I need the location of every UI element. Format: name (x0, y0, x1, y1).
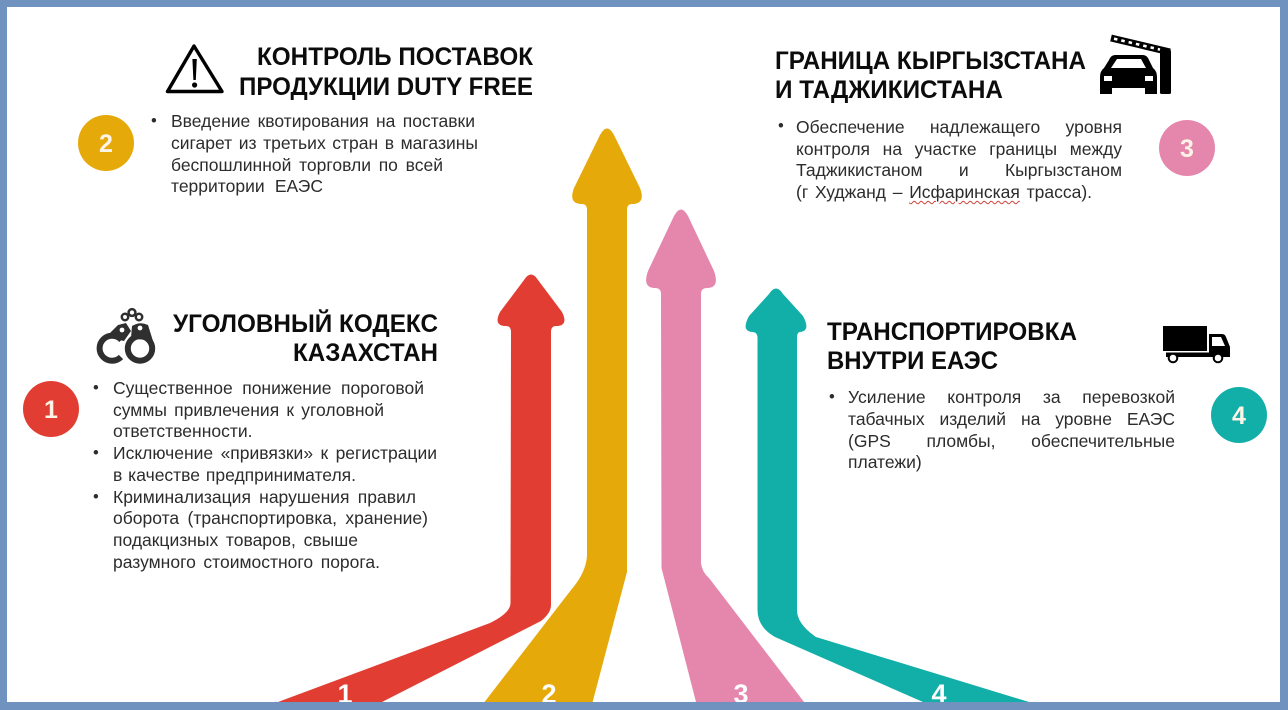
text block 1: • (93, 488, 99, 506)
icon: car at barrier (1100, 38, 1171, 94)
text block 1: Существенное понижение пороговой (113, 378, 424, 398)
text block 1: ответственности. (113, 421, 252, 441)
number badge 2: 2 (99, 130, 113, 158)
text block 1: суммы привлечения к уголовной (113, 400, 384, 420)
heading 3 (775, 47, 1086, 104)
icon: handcuffs (100, 309, 153, 361)
heading 4: ВНУТРИ ЕАЭС (827, 347, 998, 375)
text block 2: • (151, 112, 157, 130)
number badge 2 (78, 115, 134, 171)
heading 1 (173, 308, 438, 367)
text block 1: оборота (транспортировка, хранение) (113, 508, 428, 528)
arrow 2: yellow (484, 128, 642, 709)
arrow 4: teal: 4 (931, 679, 947, 709)
heading 2: ПРОДУКЦИИ DUTY FREE (239, 73, 533, 101)
number badge 1: 1 (44, 396, 58, 424)
number badge 4: 4 (1232, 402, 1246, 430)
panel 2: duty free (78, 43, 534, 196)
number badge 3 (1159, 120, 1215, 176)
heading 3: ГРАНИЦА КЫРГЫЗСТАНА (775, 47, 1086, 75)
text block 3 (778, 117, 1122, 204)
text block 1: Исключение «привязки» к регистрации (113, 443, 437, 463)
arrow 2: yellow: 2 (541, 679, 557, 709)
text block 4: (GPS пломбы, обеспечительные (848, 431, 1175, 451)
arrow 1: red (278, 274, 564, 709)
text block 2: территории ЕАЭС (171, 176, 323, 196)
heading 2: КОНТРОЛЬ ПОСТАВОК (257, 43, 534, 71)
heading 4 (827, 318, 1077, 375)
text block 3: (г Худжанд – Исфаринская трасса). (796, 182, 1092, 202)
heading 4: ТРАНСПОРТИРОВКА (827, 318, 1077, 346)
text block 1: в качестве предпринимателя. (113, 465, 356, 485)
text block 4 (829, 387, 1175, 472)
text block 2: сигарет из третьих стран в магазины (171, 133, 478, 153)
text block 4: платежи) (848, 452, 922, 472)
text block 1: • (93, 379, 99, 397)
icon: warning triangle (168, 46, 222, 92)
text block 1: подакцизных товаров, свыше (113, 530, 358, 550)
text block 3: контроля на участке границы между (796, 139, 1122, 159)
text block 1: • (93, 444, 99, 462)
text block 2 (151, 111, 478, 196)
text block 4: табачных изделий на уровне ЕАЭС (848, 409, 1175, 429)
arrow 1: red: 1 (337, 679, 353, 709)
text block 1: Криминализация нарушения правил (113, 487, 416, 507)
icon: truck (1163, 326, 1230, 362)
text block 1: разумного стоимостного порога. (113, 552, 380, 572)
text block 1 (93, 378, 437, 572)
text block 2: беспошлинной торговли по всей (171, 154, 443, 174)
arrow 3: pink (646, 210, 804, 709)
panel 1: criminal code (23, 308, 438, 572)
text block 3: Обеспечение надлежащего уровня (796, 117, 1122, 137)
text block 4: Усиление контроля за перевозкой (848, 387, 1175, 407)
text block 2: Введение квотирования на поставки (171, 111, 475, 131)
panel 4: transport (827, 318, 1267, 472)
number badge 3: 3 (1180, 135, 1194, 163)
text block 4: • (829, 388, 835, 406)
heading 1: КАЗАХСТАН (293, 339, 438, 367)
arrow 3: pink: 3 (733, 679, 749, 709)
number badge 1 (23, 381, 79, 437)
number badge 4 (1211, 387, 1267, 443)
arrow 4: teal (746, 288, 1029, 709)
heading 1: УГОЛОВНЫЙ КОДЕКС (173, 308, 438, 338)
text block 3: Таджикистаном и Кыргызстаном (796, 160, 1122, 180)
panel 3: border (775, 34, 1215, 204)
heading 3: И ТАДЖИКИСТАНА (775, 76, 1003, 104)
heading 2 (239, 43, 534, 101)
text block 3: • (778, 117, 784, 135)
